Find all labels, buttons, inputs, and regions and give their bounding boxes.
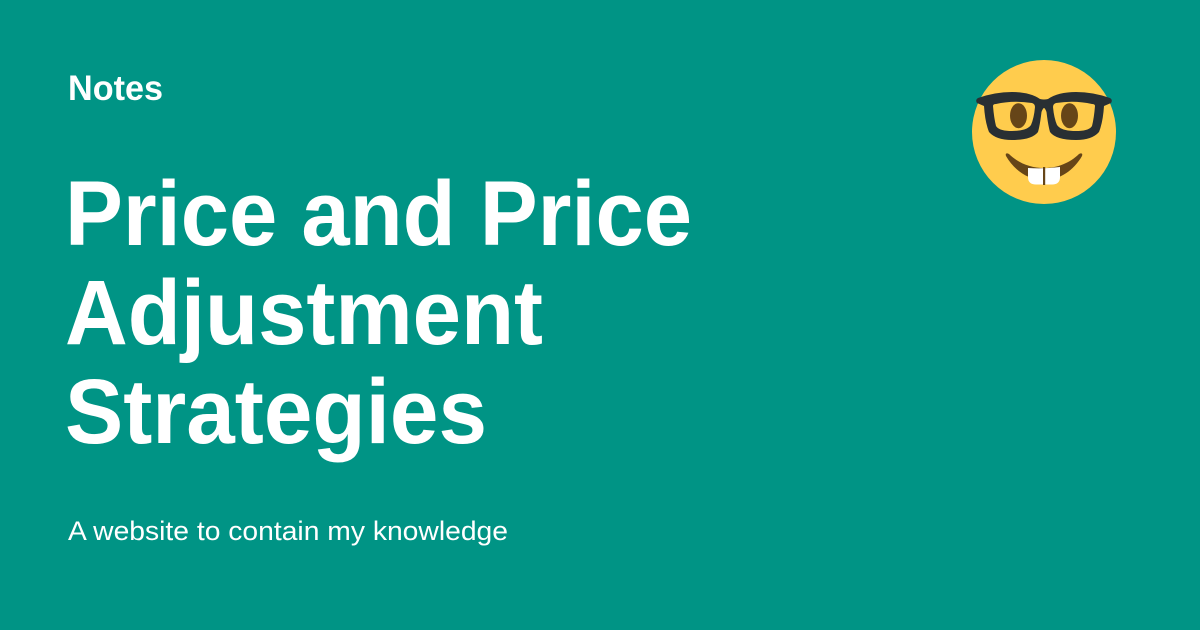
site name: Notes [68,69,163,108]
icon: nerd face emoji [972,60,1116,204]
title [65,163,692,463]
title: Strategies [65,361,487,463]
title: Adjustment [65,262,543,364]
title: Price and Price [65,163,692,265]
tagline: A website to contain my knowledge [68,516,508,546]
